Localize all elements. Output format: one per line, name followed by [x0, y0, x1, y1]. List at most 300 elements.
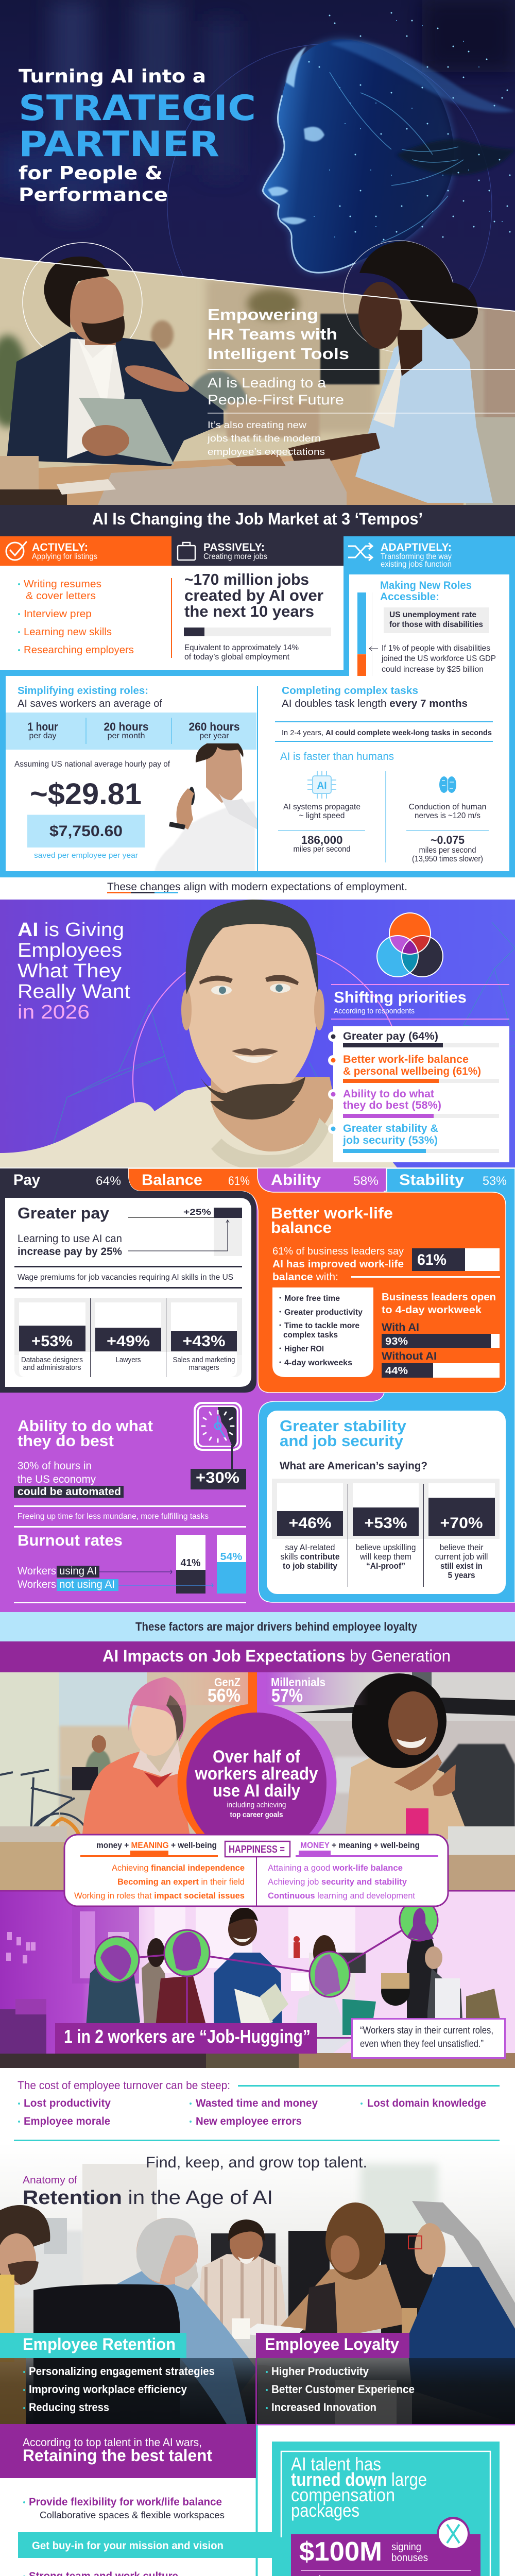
callout: unemployment rate: US unemployment rate	[389, 611, 476, 619]
panel: AI talent packages	[272, 2442, 500, 2576]
heading: shifting priorities: Shifting priorities	[334, 988, 467, 1006]
icon: shuffle	[348, 543, 372, 561]
band: hours saved: per month	[107, 732, 145, 740]
teal frame	[256, 2424, 515, 2576]
panel: work-life balance content: AI has improved work-life	[272, 1259, 404, 1270]
panel: retaining heading: According to top talent in the AI wars,	[23, 2436, 202, 2449]
icon: check	[6, 542, 26, 560]
text block: hero subtitle: employee’s expectations	[208, 447, 325, 457]
panel: ability to do what they do best: 30% of hours in	[18, 1460, 92, 1472]
panel: adaptively: ADAPTIVELY:	[381, 541, 452, 553]
icon: X badge	[437, 2517, 470, 2552]
gauge: half of workers	[178, 1672, 336, 1843]
callout: plus 30 percent	[191, 1469, 246, 1489]
callout: unemployment rate: for those with disabilities	[389, 620, 483, 629]
list: benefits: Greater productivity	[284, 1308, 363, 1317]
panel: retaining heading	[0, 2424, 256, 2478]
panel: AI talent packages: AI talent has	[291, 2453, 381, 2475]
stat: AI speed: 186,000	[301, 834, 343, 846]
panel: actively: ACTIVELY:	[32, 541, 88, 553]
diagonal divider	[0, 258, 515, 311]
chart: what Americans say: will keep them	[359, 1552, 411, 1562]
pink arc	[133, 944, 403, 1214]
panel: passively: PASSIVELY:	[203, 541, 265, 553]
arrow	[369, 647, 378, 651]
purple background	[0, 1168, 515, 1612]
person: man with tablet	[7, 257, 224, 466]
hero photo: HR meeting	[0, 241, 515, 505]
chart: what Americans say: “AI-proof”	[366, 1562, 405, 1571]
callout: could be automated: could be automated	[18, 1486, 121, 1498]
section: turnover cost: Lost productivity	[24, 2097, 111, 2109]
heading: what they want: AI is Giving	[18, 919, 124, 941]
panel: ability to do what they do best: they do best	[18, 1432, 114, 1450]
band: buy-in	[18, 2532, 272, 2558]
hero background: dark office	[0, 0, 515, 319]
chart: wage premiums: +49%	[107, 1333, 150, 1350]
text block: hero subtitle: It’s also creating new	[208, 420, 307, 430]
gauge: half of workers: use AI daily	[213, 1781, 300, 1801]
heading: title: Turning AI into a	[19, 66, 206, 87]
list: benefits: Higher ROI	[284, 1345, 324, 1353]
list: benefits: Time to tackle more	[284, 1321, 359, 1330]
panel: employee loyalty: Better Customer Experience	[271, 2383, 415, 2396]
icon: clock	[194, 1402, 242, 1469]
panel: completing complex tasks: In 2-4 years, AI could complete week-long tasks in seconds	[282, 728, 492, 737]
priority: pay: Greater pay (64%)	[343, 1030, 438, 1042]
gauge: half of workers: including achieving	[227, 1801, 286, 1809]
panel: work-life balance content: Better work-life	[271, 1204, 393, 1222]
chart: venn diagram	[377, 913, 443, 977]
band: hours saved: per year	[200, 732, 229, 740]
list: active tasks: Writing resumes	[24, 579, 101, 590]
equation: gen z: money + MEANING + well-being	[96, 1840, 217, 1850]
photo: open office	[0, 1891, 515, 2068]
band: hours saved: 1 hour	[28, 720, 58, 733]
panel: AI talent packages: packages	[291, 2500, 359, 2521]
heading: what they want: Employees	[18, 940, 122, 961]
text block: hero subtitle: HR Teams with	[208, 325, 337, 343]
chart: wage premiums: Lawyers	[115, 1355, 141, 1364]
section: four priorities detail	[0, 1167, 515, 1612]
text block: hero subtitle: jobs that fit the modern	[207, 433, 321, 444]
stat: Millennials: 57%	[271, 1685, 303, 1706]
band: hours saved: per day	[29, 732, 57, 740]
band: hours saved: 20 hours	[104, 720, 148, 733]
stat: human nerves: ~0.075	[431, 834, 465, 846]
band: buy-in: Get buy-in for your mission and vision	[32, 2540, 224, 2552]
text block: hero subtitle: Intelligent Tools	[208, 345, 349, 363]
equation: happiness: HAPPINESS =	[229, 1844, 285, 1855]
priority: pay	[343, 1030, 499, 1047]
stat: Millennials	[271, 1675, 325, 1706]
list: benefits: complex tasks	[283, 1331, 338, 1340]
stat: human nerves: nerves is ~120 m/s	[415, 811, 480, 820]
panel: happiness equation	[64, 1835, 448, 1906]
icon: bag	[178, 543, 195, 560]
list: gen z goals	[74, 1863, 245, 1901]
panel: actively: Applying for listings	[32, 552, 97, 561]
gauge: half of workers: Over half of	[213, 1747, 301, 1767]
priority: balance: & personal wellbeing (61%)	[343, 1065, 481, 1077]
chart: unemployment bar	[357, 592, 372, 676]
bar: 14 percent	[184, 628, 331, 636]
photo: team meeting	[0, 2143, 515, 2424]
panel: ability to do what they do best: the US economy	[18, 1473, 96, 1485]
equation: millennials: MONEY + meaning + well-being	[300, 1840, 420, 1850]
panel: employee retention	[0, 2333, 215, 2414]
stat: human nerves: (13,950 times slower)	[412, 855, 483, 863]
list: retention tactics	[18, 2496, 272, 2576]
list: active tasks: Interview prep	[24, 608, 92, 620]
tabs: percent labels	[0, 1167, 515, 1191]
section: turnover cost: Wasted time and money	[196, 2097, 318, 2109]
chart: what Americans say: to job stability	[283, 1562, 338, 1571]
gauge: half of workers: workers already	[195, 1764, 318, 1784]
heading: what they want: in 2026	[18, 1002, 90, 1023]
heading: what they want: What They	[18, 960, 122, 982]
panel: work-life balance content: balance	[271, 1218, 332, 1236]
panel: ability to do what they do best: Burnout rates	[18, 1531, 123, 1549]
connector line	[317, 2037, 351, 2039]
tabs: percent labels: Stability	[399, 1172, 464, 1189]
panel: priorities list	[328, 1026, 509, 1162]
panel: employee loyalty: Higher Productivity	[271, 2365, 369, 2378]
panel: orange balance	[128, 1168, 506, 1393]
list: gen z goals: Working in roles that impact societal issues	[74, 1891, 245, 1901]
list: gen z goals: Achieving financial independence	[112, 1863, 245, 1873]
panel: retaining heading: Retaining the best talent	[23, 2446, 212, 2465]
tabs: percent labels: Pay	[13, 1172, 40, 1189]
chart: 4-day workweek: 44%	[385, 1365, 408, 1377]
panel: adaptively: existing jobs function	[381, 560, 452, 569]
callout: unemployment rate	[384, 607, 489, 633]
equation: millennials	[296, 1840, 438, 1857]
heading: title: for People &	[19, 163, 163, 184]
stat: human nerves	[406, 803, 489, 863]
panel: ability to do what they do best	[14, 1402, 246, 1603]
panel: completing complex tasks: AI is faster than humans	[280, 751, 394, 762]
gauge: half of workers: top career goals	[230, 1810, 283, 1819]
chart: wage premiums: and administrators	[23, 1363, 81, 1372]
section: turnover cost: Employee morale	[24, 2115, 110, 2127]
panel: stability card: Greater stability	[280, 1417, 407, 1435]
panel: stability card	[267, 1411, 506, 1594]
section: generations photo	[0, 1672, 515, 1893]
callout: quote: “Workers stay in their current roles,	[360, 2025, 493, 2036]
heading: anatomy of retention: Retention in the Age of AI	[23, 2187, 273, 2209]
chart: what Americans say: skills contribute	[280, 1552, 340, 1562]
person: woman in blue blazer	[288, 241, 493, 503]
panel: adaptively: joined the US workforce US GDP	[381, 654, 496, 663]
icon: AI chip: AI	[317, 781, 327, 791]
panel: stability card: and job security	[280, 1432, 404, 1450]
callout: quote	[352, 2019, 505, 2058]
chart: burnout rates: not using AI	[59, 1579, 115, 1590]
callout: compensation figures	[291, 2534, 480, 2576]
panel: completing complex tasks	[275, 685, 493, 863]
panel: blue backdrop	[0, 536, 515, 877]
equation: gen z	[80, 1840, 218, 1857]
panel: employee retention: Reducing stress	[29, 2401, 109, 2414]
callout: job hugging	[55, 2023, 317, 2054]
priority: stability: Greater stability &	[343, 1123, 438, 1134]
section: what employees want	[0, 900, 515, 1167]
list: benefits: 4-day workweeks	[284, 1359, 352, 1367]
panel: employee retention: Employee Retention	[23, 2335, 176, 2353]
panel: employee loyalty: Employee Loyalty	[265, 2335, 399, 2353]
panel: simplifying existing roles: Simplifying existing roles:	[18, 685, 148, 697]
text block: hero subtitle: AI is Leading to a	[208, 375, 327, 391]
heading: anatomy of retention	[23, 2175, 273, 2209]
section: retention	[0, 2143, 515, 2424]
heading: find keep grow: Find, keep, and grow top talent.	[146, 2154, 367, 2171]
panel: simplifying existing roles	[6, 676, 509, 871]
heading: shifting priorities	[331, 984, 509, 1020]
chart: what Americans say: current job will	[435, 1552, 488, 1562]
panel: adaptively: Making New Roles	[380, 580, 472, 591]
list: retention tactics: Collaborative spaces & flexible workspaces	[40, 2510, 225, 2520]
heading: anatomy of retention: Anatomy of	[23, 2175, 77, 2186]
priority: stability: job security (53%)	[342, 1134, 438, 1146]
panel: employee loyalty: Increased Innovation	[271, 2401, 376, 2414]
stat: Gen Z: GenZ	[214, 1675, 241, 1689]
list: active tasks	[19, 579, 134, 656]
panel: simplifying existing roles: ~$29.81	[30, 777, 142, 811]
band: dark heading	[0, 505, 515, 536]
chart: what Americans say	[272, 1479, 500, 1587]
list: benefits: More free time	[284, 1294, 340, 1303]
stat: AI speed: AI systems propagate	[283, 803, 360, 811]
panel: simplifying existing roles: AI saves workers an average of	[18, 698, 162, 709]
stat: human nerves: Conduction of human	[409, 803, 486, 811]
photo: two workers	[0, 1672, 515, 1893]
panel: employee loyalty	[255, 2333, 415, 2424]
callout: compensation figures: $100M	[299, 2537, 382, 2567]
priority: ability: Ability to do what	[343, 1088, 434, 1100]
bar: 61 percent: 61%	[417, 1251, 447, 1268]
section: job market tempos	[0, 505, 515, 877]
gradient label panels	[154, 1672, 248, 1705]
chart: burnout rates: 41%	[180, 1557, 201, 1569]
chart: wage premiums	[14, 1298, 242, 1377]
band: generation heading	[0, 1641, 515, 1672]
chart: what Americans say: believe upskilling	[355, 1543, 416, 1552]
callout: compensation figures: bonuses	[391, 2552, 428, 2564]
chart: what Americans say: +46%	[288, 1515, 332, 1532]
chart: what Americans say: believe their	[440, 1543, 484, 1552]
chart: what Americans say: say AI-related	[285, 1543, 335, 1552]
chart: burnout rates: 54%	[220, 1551, 243, 1563]
section: turnover cost: New employee errors	[196, 2115, 302, 2127]
stat: AI speed	[278, 803, 365, 854]
panel: AI talent packages: compensation	[291, 2484, 395, 2505]
list: millennial goals: Achieving job security and stability	[268, 1877, 407, 1887]
chart: burnout rates	[18, 1535, 246, 1594]
blurred office bands	[0, 0, 515, 216]
tabs: percent labels: 53%	[483, 1174, 507, 1188]
band: hours saved: 260 hours	[188, 720, 240, 733]
panel: passively: the next 10 years	[184, 602, 314, 620]
icon: brain	[439, 776, 456, 793]
callout: compensation figures: signing	[391, 2541, 421, 2553]
list: active tasks: Learning new skills	[24, 626, 112, 638]
chart: burnout rates: using AI	[59, 1565, 97, 1577]
panel: work-life balance content: 61% of business leaders say	[272, 1246, 404, 1257]
callout: quote: even when they feel unsatisfied.”	[360, 2039, 484, 2049]
text block: hero subtitle	[207, 306, 515, 457]
panel: completing complex tasks: Completing complex tasks	[282, 685, 418, 697]
stat: Millennials: Millennials	[271, 1675, 325, 1689]
panel: AI talent packages: turned down large	[291, 2469, 427, 2490]
panel: passively: Creating more jobs	[203, 552, 267, 561]
photo: man on phone	[154, 742, 258, 871]
priority: balance: Better work-life balance	[343, 1054, 469, 1065]
priority: ability	[343, 1088, 499, 1118]
network lines	[46, 922, 515, 1167]
stat: Gen Z	[208, 1675, 241, 1706]
heading: title	[19, 66, 256, 206]
heading: shifting priorities: According to respondents	[334, 1007, 415, 1015]
heading: title: Performance	[19, 184, 168, 206]
band: employee loyalty: These factors are major drivers behind employee loyalty	[135, 1620, 417, 1633]
chart: wage premiums: Sales and marketing	[173, 1355, 235, 1364]
equation: happiness	[225, 1841, 290, 1857]
panel: work-life balance content: balance with:	[272, 1272, 338, 1283]
decorative rings	[23, 243, 142, 362]
tabs: percent labels: 58%	[353, 1174, 379, 1188]
band: generation heading: AI Impacts on Job Expectations by Generation	[102, 1647, 451, 1665]
chart: plus 25 percent	[128, 1207, 242, 1256]
tabs: percent labels: Balance	[142, 1172, 202, 1189]
tabs: percent labels: 61%	[228, 1174, 250, 1188]
chart: 4-day workweek: Business leaders open	[382, 1292, 496, 1303]
chart: what Americans say: +70%	[440, 1515, 483, 1532]
tabs: percent labels: Ability	[271, 1172, 321, 1189]
panel: simplifying existing roles: Assuming US national average hourly pay of	[14, 760, 170, 769]
panel: greater pay card: increase pay by 25%	[18, 1246, 122, 1258]
panel: adaptively: could increase by $25 billion	[382, 665, 484, 674]
priority: stability	[342, 1123, 499, 1153]
chart: wage premiums: +53%	[31, 1333, 73, 1350]
panel: blue stability	[259, 1168, 515, 1602]
section: turnover cost: The cost of employee turnover can be steep:	[18, 2079, 230, 2092]
callout: plus 30 percent: +30%	[196, 1469, 239, 1486]
heading: job market: AI Is Changing the Job Market at 3 ‘Tempos’	[92, 510, 423, 528]
stat: Gen Z: 56%	[208, 1685, 241, 1706]
panel: passively: Equivalent to approximately 14%	[184, 643, 299, 652]
panel: employee retention: Improving workplace efficiency	[29, 2383, 187, 2396]
stat: human nerves: miles per second	[419, 846, 476, 855]
icon: digital glowing face	[263, 13, 515, 273]
chart: what Americans say: still exist in	[440, 1562, 483, 1571]
heading: what they want	[18, 919, 130, 1023]
stat: AI speed: ~ light speed	[299, 811, 345, 820]
list: gen z goals: Becoming an expert in their field	[117, 1877, 245, 1887]
panel: greater pay card	[5, 1198, 251, 1387]
chart: burnout rates: Workers	[18, 1579, 56, 1590]
bar: 61 percent	[412, 1248, 500, 1271]
chart: wage premiums: managers	[188, 1363, 219, 1372]
panel: greater pay card: Learning to use AI can	[18, 1233, 122, 1245]
portrait circles: job huggers	[95, 1900, 438, 2023]
chart: 4-day workweek: Without AI	[382, 1350, 437, 1362]
panel: passively: of today’s global employment	[184, 653, 290, 662]
heading: what they want: Really Want	[18, 981, 130, 1003]
heading: title: PARTNER	[19, 124, 219, 165]
priority: balance	[343, 1054, 499, 1083]
panel: ability to do what they do best: Ability to do what	[18, 1417, 153, 1435]
purple background	[0, 900, 515, 1167]
priority: ability: they do best (58%)	[343, 1099, 441, 1111]
chart: plus 25 percent: +25%	[183, 1207, 211, 1217]
panel: actively	[0, 536, 171, 670]
panel: passively: created by AI over	[184, 586, 323, 604]
list: millennial goals	[268, 1863, 415, 1901]
list: active tasks: Researching employers	[24, 645, 134, 656]
list: retention tactics: Provide flexibility for work/life balance	[29, 2496, 222, 2508]
chart: burnout rates: Workers	[18, 1565, 56, 1577]
list: active tasks: & cover letters	[26, 590, 96, 602]
chart: 4-day workweek	[382, 1292, 500, 1378]
heading: title: STRATEGIC	[19, 88, 256, 129]
panel: stability card: What are American’s saying?	[280, 1460, 427, 1472]
tabs: percent labels: 64%	[96, 1174, 121, 1188]
panel: adaptively: Accessible:	[380, 591, 439, 603]
person: smiling man	[0, 900, 397, 1167]
panel: dark pay	[0, 1168, 256, 1393]
panel: employee retention: Personalizing engagement strategies	[29, 2365, 215, 2378]
panel: ability to do what they do best: Freeing up time for less mundane, more fulfilling tasks	[18, 1512, 209, 1521]
section: office job hugging	[0, 1891, 515, 2068]
panel: greater pay card: Wage premiums for job vacancies requiring AI skills in the US	[18, 1273, 233, 1282]
text block: hero subtitle: People-First Future	[208, 392, 344, 408]
panel: adaptively: If 1% of people with disabilities	[382, 644, 490, 653]
panel: passively	[171, 536, 344, 670]
panel: greater pay card: Greater pay	[18, 1204, 110, 1222]
list: millennial goals: Continuous learning and development	[268, 1891, 415, 1901]
chart: wage premiums: Database designers	[21, 1355, 83, 1364]
panel: passively: ~170 million jobs	[184, 570, 309, 588]
chart: 4-day workweek: 93%	[385, 1336, 408, 1347]
chart: 4-day workweek: With AI	[382, 1321, 419, 1333]
section: turnover cost: Lost domain knowledge	[367, 2097, 486, 2109]
callout: job hugging: 1 in 2 workers are “Job-Hugging”	[64, 2026, 311, 2047]
chart: what Americans say: 5 years	[448, 1571, 475, 1580]
purple rule beside panel	[0, 1890, 515, 1892]
stat: AI speed: miles per second	[294, 845, 350, 854]
chart: wage premiums: +43%	[182, 1333, 226, 1350]
decorative arc	[167, 44, 492, 368]
list: millennial goals: Attaining a good work-life balance	[268, 1863, 403, 1873]
list: benefits	[272, 1287, 373, 1377]
band: employee loyalty	[0, 1612, 515, 1641]
panel: adaptively: Transforming the way	[381, 552, 452, 561]
callout: annual savings	[27, 815, 145, 848]
chart: 4-day workweek: to 4-day workweek	[382, 1304, 482, 1316]
chart: what Americans say: +53%	[365, 1515, 407, 1532]
transition text: These changes align with modern expectations of employment.	[107, 881, 407, 893]
panel: completing complex tasks: AI doubles task length every 7 months	[282, 698, 468, 709]
panel: adaptively	[348, 541, 509, 676]
text block: hero subtitle: Empowering	[208, 306, 318, 324]
callout: annual savings: $7,750.60	[49, 823, 123, 840]
panel: work-life balance content	[271, 1204, 500, 1378]
section: retaining the best talent	[0, 2424, 515, 2576]
icon: AI chip	[307, 771, 336, 799]
panel: simplifying existing roles: saved per employee per year	[34, 851, 138, 860]
section: turnover cost	[14, 2079, 500, 2141]
